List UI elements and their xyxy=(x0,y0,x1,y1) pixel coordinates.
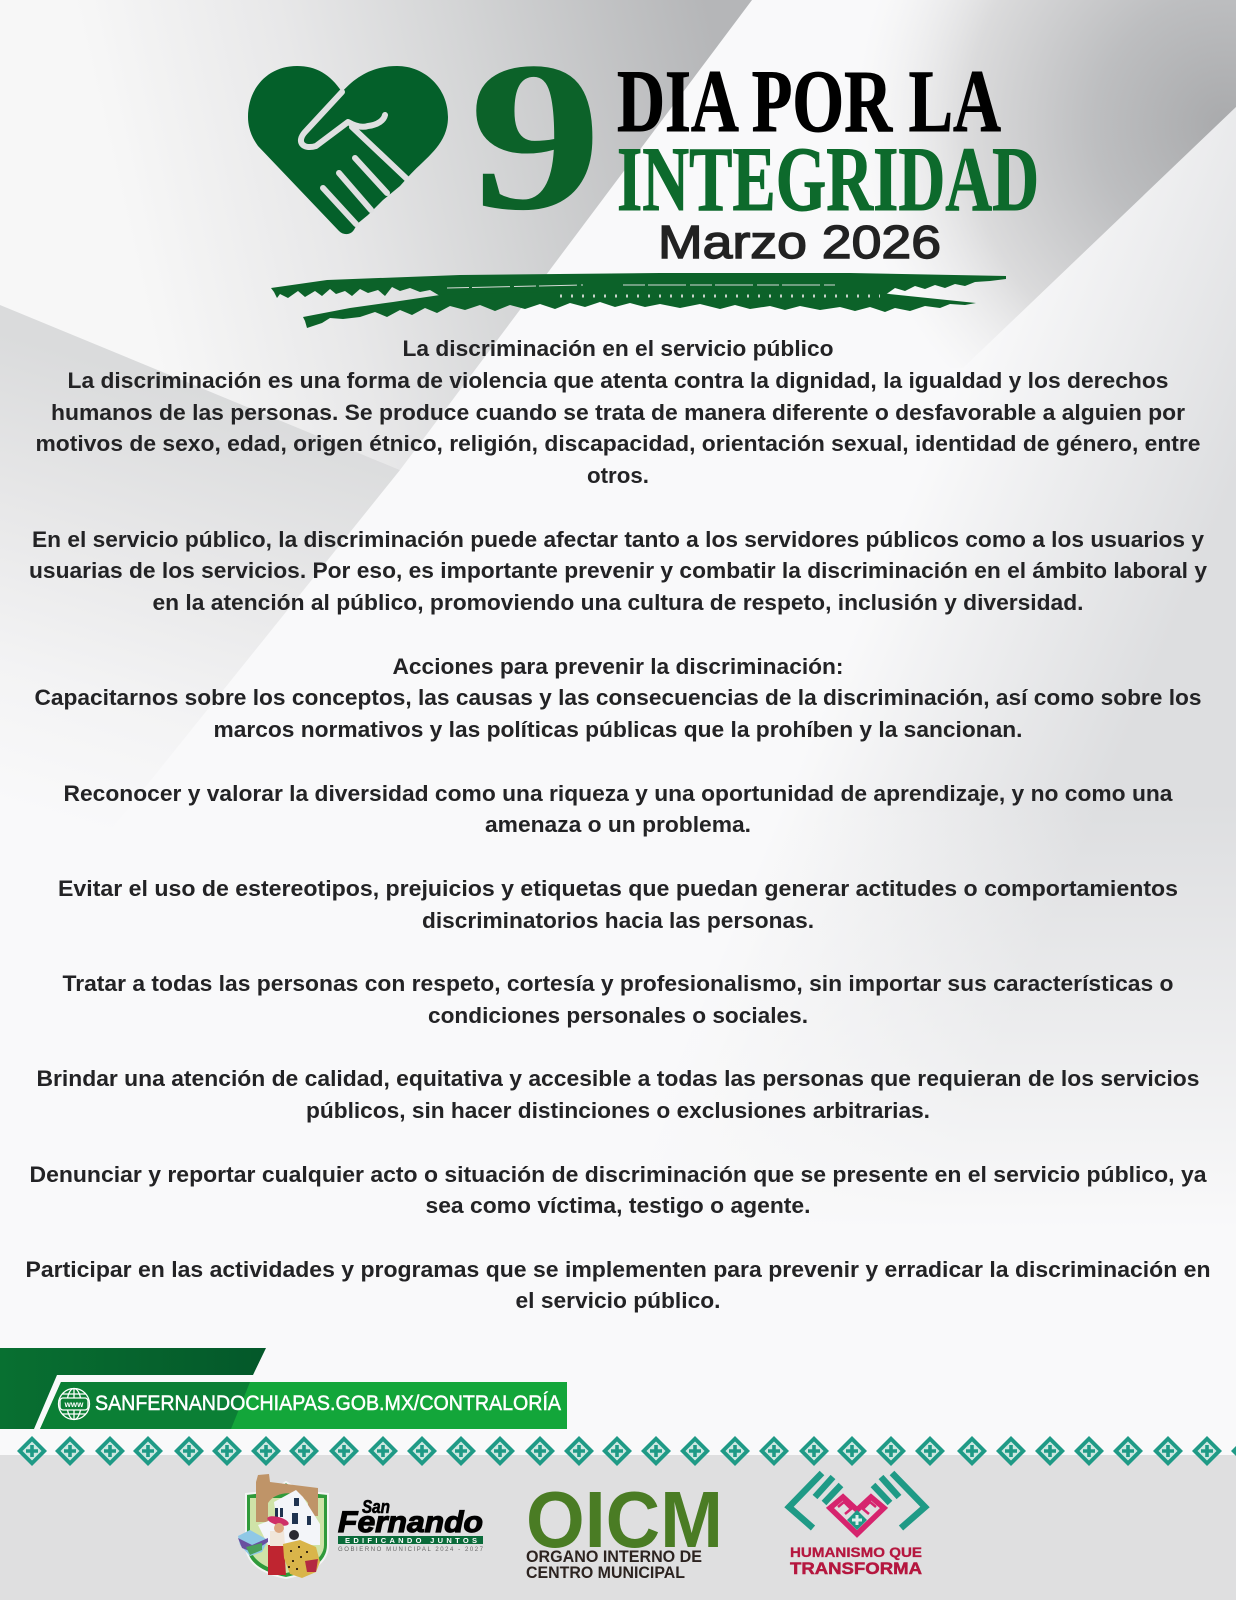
heading: DIA POR LA: DIA POR LA xyxy=(617,53,1001,151)
url text: SANFERNANDOCHIAPAS.GOB.MX/CONTRALORÍA xyxy=(95,1392,561,1415)
body text: humanos de las personas. Se produce cuando se trata de manera diferente o desfavorable a alguien por xyxy=(51,400,1185,425)
body text: el servicio público. xyxy=(516,1288,720,1313)
body text: En el servicio público, la discriminación puede afectar tanto a los servidores públicos como a los usuarios y xyxy=(32,527,1205,552)
body text: Denunciar y reportar cualquier acto o situación de discriminación que se presente en el servicio público, ya xyxy=(30,1162,1207,1187)
body text: motivos de sexo, edad, origen étnico, religión, discapacidad, orientación sexual, identidad de género, entre xyxy=(36,431,1200,456)
logo: Humanismo que Transforma: HUMANISMO QUE xyxy=(790,1544,922,1560)
brush stroke divider xyxy=(271,273,1006,328)
body text: Acciones para prevenir la discriminación: xyxy=(392,654,844,679)
footer band xyxy=(0,1455,1236,1600)
body text: discriminatorios hacia las personas. xyxy=(422,908,814,933)
body text: Brindar una atención de calidad, equitativa y accesible a todas las personas que requieran de los servicios xyxy=(36,1066,1200,1091)
heading: INTEGRIDAD: INTEGRIDAD xyxy=(617,128,1039,230)
body text: públicos, sin hacer distinciones o exclusiones arbitrarias. xyxy=(306,1098,930,1123)
body text: La discriminación en el servicio público xyxy=(402,336,834,361)
body text: otros. xyxy=(587,463,649,488)
logo: San Fernando wordmark: GOBIERNO MUNICIPAL 2024 - 2027 xyxy=(338,1547,484,1553)
body text: condiciones personales o sociales. xyxy=(428,1003,808,1028)
numeral 9: 9 xyxy=(469,18,602,255)
body text: amenaza o un problema. xyxy=(485,812,751,837)
icon: www globe xyxy=(58,1388,90,1420)
logo: San Fernando shield xyxy=(238,1474,328,1578)
website banner xyxy=(0,1348,567,1429)
icon: heart with handshake xyxy=(248,66,448,234)
body text: en la atención al público, promoviendo una cultura de respeto, inclusión y diversidad. xyxy=(152,590,1084,615)
header xyxy=(248,18,1039,328)
icon: www globe: www xyxy=(64,1400,84,1409)
logo: San Fernando wordmark: San xyxy=(362,1497,390,1517)
body text: La discriminación es una forma de violencia que atenta contra la dignidad, la igualdad y los derechos xyxy=(68,368,1168,393)
body text: usuarias de los servicios. Por eso, es importante prevenir y combatir la discriminación en el ámbito laboral y xyxy=(29,558,1208,583)
body text: marcos normativos y las políticas públicas que la prohíben y la sancionan. xyxy=(214,717,1022,742)
logo: OICM: ORGANO INTERNO DE xyxy=(526,1548,702,1566)
logo: Humanismo que Transforma xyxy=(789,1473,925,1578)
body text: Evitar el uso de estereotipos, prejuicios y etiquetas que puedan generar actitudes o comportamientos xyxy=(58,876,1178,901)
body text: Reconocer y valorar la diversidad como una riqueza y una oportunidad de aprendizaje, y no como una xyxy=(64,781,1173,806)
diamond pattern row xyxy=(17,1436,1236,1466)
logo: San Fernando wordmark: Fernando xyxy=(338,1506,483,1539)
logo: OICM: OICM xyxy=(526,1475,723,1564)
body text xyxy=(26,336,1210,1313)
logo: Humanismo que Transforma: TRANSFORMA xyxy=(790,1559,922,1578)
logo: San Fernando wordmark xyxy=(338,1497,484,1553)
body text: sea como víctima, testigo o agente. xyxy=(426,1193,810,1218)
body text: Tratar a todas las personas con respeto, cortesía y profesionalismo, sin importar sus características o xyxy=(62,971,1174,996)
logo: San Fernando wordmark: EDIFICANDO JUNTOS xyxy=(345,1536,477,1545)
body text: Participar en las actividades y programas que se implementen para prevenir y erradicar la discriminación en xyxy=(26,1257,1210,1282)
body text: Capacitarnos sobre los conceptos, las causas y las consecuencias de la discriminación, así como sobre los xyxy=(34,685,1202,710)
heading: Marzo 2026: Marzo 2026 xyxy=(658,216,941,268)
logo: OICM: CENTRO MUNICIPAL xyxy=(526,1564,685,1582)
